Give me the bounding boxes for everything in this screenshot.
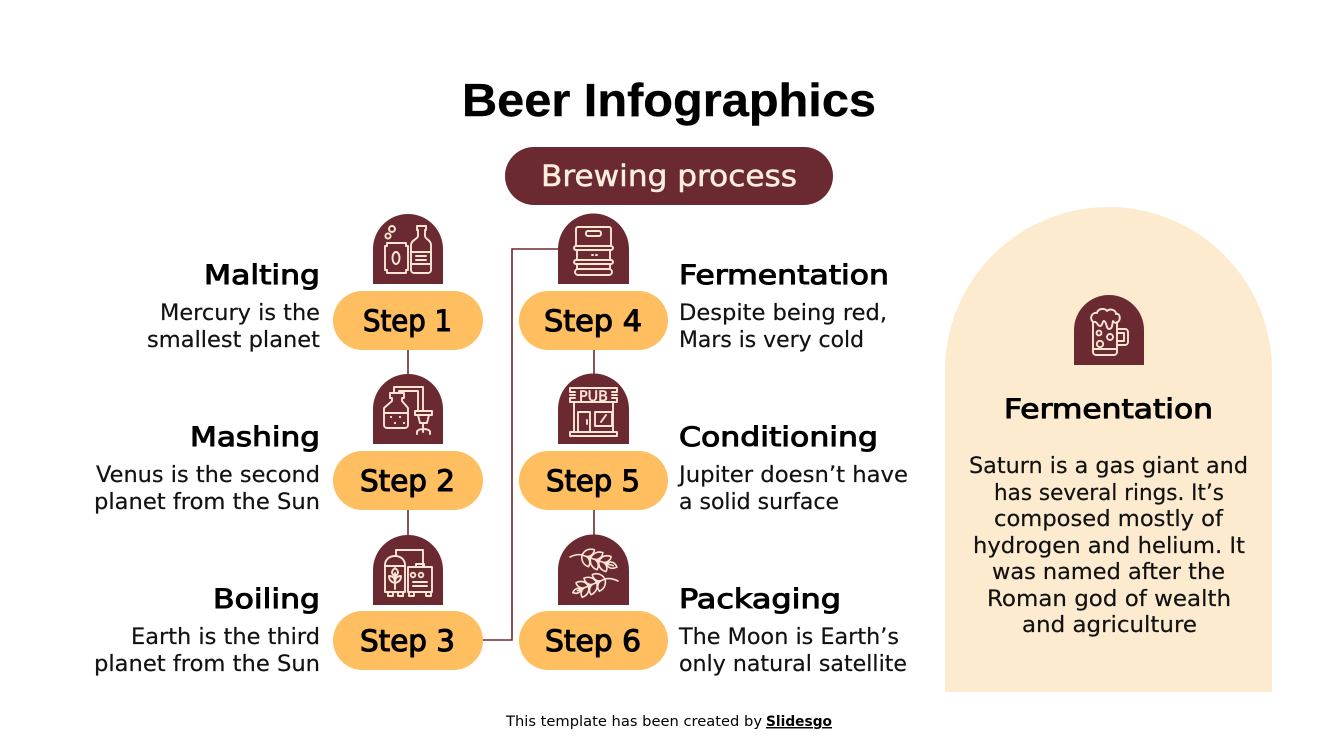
connector: step 4 to step 5 bbox=[593, 349, 595, 375]
heading: Packaging: Packaging bbox=[679, 584, 841, 615]
description bbox=[147, 301, 320, 353]
description bbox=[94, 463, 320, 515]
pill: Step 3: Step 3 bbox=[360, 624, 455, 658]
panel: Fermentation detail bbox=[945, 207, 1272, 692]
heading: Boiling: Boiling bbox=[213, 584, 320, 615]
step 4: Fermentation bbox=[519, 214, 889, 353]
subtitle pill: Brewing process: Brewing process bbox=[541, 159, 797, 193]
icon: pub bbox=[558, 374, 629, 444]
panel background arch bbox=[945, 207, 1272, 692]
description: Earth is the third bbox=[131, 625, 320, 650]
panel text: and agriculture bbox=[1022, 613, 1197, 638]
icon: beer mug bbox=[1074, 295, 1144, 365]
pill: Step 2 bbox=[333, 451, 483, 510]
description: Venus is the second bbox=[96, 463, 320, 488]
icon: flask and still bbox=[373, 374, 443, 444]
icon: pub: PUB bbox=[579, 389, 608, 405]
step 5: Conditioning bbox=[519, 374, 908, 515]
panel text: composed mostly of bbox=[994, 507, 1224, 532]
panel text: Roman god of wealth bbox=[987, 587, 1231, 612]
pill: Step 1 bbox=[333, 291, 483, 350]
description: a solid surface bbox=[679, 490, 839, 515]
icon: wheat bbox=[558, 534, 629, 605]
pill: Step 1: Step 1 bbox=[363, 304, 452, 338]
icon: brewing tanks bbox=[373, 535, 443, 605]
pill: Step 4 bbox=[519, 291, 668, 350]
step 6: Packaging bbox=[519, 534, 907, 677]
heading: Fermentation: Fermentation bbox=[679, 260, 889, 291]
heading: Mashing: Mashing bbox=[190, 422, 320, 453]
description: The Moon is Earth’s bbox=[678, 625, 899, 650]
panel text: hydrogen and helium. It bbox=[973, 534, 1245, 559]
description: only natural satellite bbox=[679, 652, 907, 677]
description bbox=[677, 463, 908, 515]
connector: step 2 to step 3 bbox=[407, 509, 409, 536]
panel text: was named after the bbox=[992, 560, 1225, 585]
pill: Step 5: Step 5 bbox=[546, 464, 640, 498]
description: Jupiter doesn’t have bbox=[677, 463, 908, 488]
heading: Conditioning: Conditioning bbox=[679, 422, 878, 453]
pill: Step 6: Step 6 bbox=[545, 624, 641, 658]
description: Mars is very cold bbox=[679, 328, 864, 353]
panel text bbox=[969, 454, 1248, 638]
subtitle pill: Brewing process bbox=[505, 147, 833, 205]
description bbox=[679, 301, 887, 353]
footer credit: This template has been created by bbox=[505, 714, 762, 730]
description: Mercury is the bbox=[160, 301, 320, 326]
icon: keg bbox=[558, 214, 629, 284]
description bbox=[94, 625, 320, 677]
pill: Step 4: Step 4 bbox=[544, 304, 642, 338]
heading: Malting: Malting bbox=[204, 260, 320, 291]
pill: Step 5 bbox=[519, 451, 668, 510]
connector: step 3 to step 4 bbox=[482, 249, 559, 640]
description: planet from the Sun bbox=[94, 652, 320, 677]
pill: Step 2: Step 2 bbox=[360, 464, 455, 498]
footer credit: Slidesgo bbox=[766, 714, 832, 730]
connector: step 5 to step 6 bbox=[593, 509, 595, 536]
description: planet from the Sun bbox=[94, 490, 320, 515]
panel heading: Fermentation bbox=[1004, 394, 1213, 425]
step 1: Malting bbox=[147, 214, 483, 353]
pill: Step 6 bbox=[519, 611, 668, 670]
icon: can and bottle bbox=[373, 214, 443, 284]
description: smallest planet bbox=[147, 328, 320, 353]
panel text: has several rings. It’s bbox=[994, 481, 1224, 506]
step 2: Mashing bbox=[94, 374, 483, 515]
description bbox=[678, 625, 907, 677]
title: Beer Infographics bbox=[462, 74, 876, 126]
pill: Step 3 bbox=[333, 611, 483, 670]
step 3: Boiling bbox=[94, 535, 483, 677]
connector: step 1 to step 2 bbox=[407, 349, 409, 375]
panel text: Saturn is a gas giant and bbox=[969, 454, 1248, 479]
description: Despite being red, bbox=[679, 301, 887, 326]
